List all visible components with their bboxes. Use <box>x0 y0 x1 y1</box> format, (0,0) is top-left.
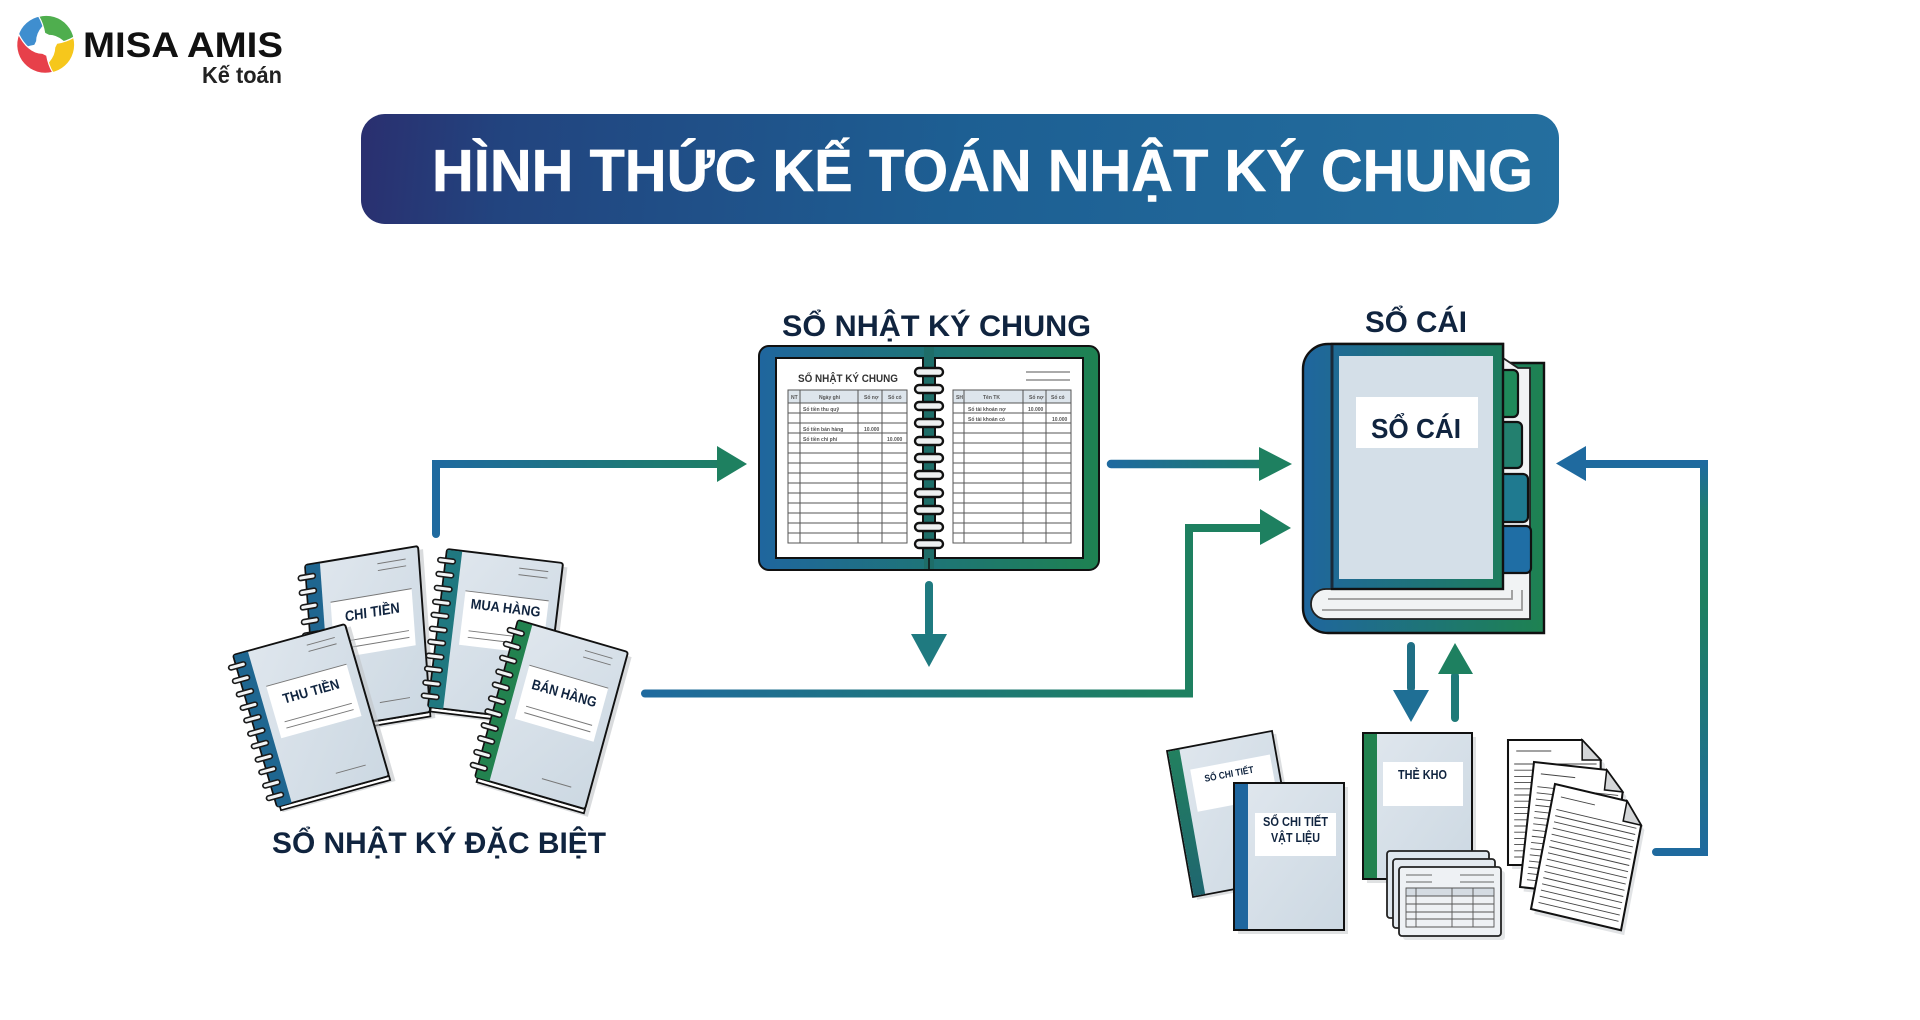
stock card book: thẻ kho <box>1363 733 1476 883</box>
detail book: sổ chi tiết vật liệu: SỔ CHI TIẾT <box>1263 814 1328 829</box>
title banner <box>361 114 1559 224</box>
stock card stack <box>1387 851 1505 940</box>
right page: Số tài khoản có <box>968 416 1005 423</box>
ledger label text: SỔ CÁI <box>1371 413 1461 444</box>
title text: HÌNH THỨC KẾ TOÁN NHẬT KÝ CHUNG <box>432 137 1533 204</box>
arrow: special journals to general journal <box>436 446 747 534</box>
left page: 10.000 <box>864 427 880 433</box>
arrow: ledger down to detail books <box>1393 642 1429 722</box>
arrow: general journal downward <box>911 581 947 667</box>
detail book: sổ chi tiết vật liệu <box>1234 783 1348 934</box>
detail book: sổ chi tiết: SỔ CHI TIẾT <box>1204 764 1255 785</box>
notebook: chi tiền: CHI TIỀN <box>344 599 400 625</box>
heading: general journal: SỔ NHẬT KÝ CHUNG <box>782 309 1091 343</box>
notebook: bán hàng <box>466 618 633 817</box>
right page: Số nợ <box>1029 394 1044 401</box>
left page: 10.000 <box>887 437 903 443</box>
source documents stack <box>1508 740 1649 935</box>
notebook: mua hàng <box>419 548 568 728</box>
left page: NT <box>791 395 798 401</box>
notebook: chi tiền <box>297 545 435 739</box>
heading: special journals: SỔ NHẬT KÝ ĐẶC BIỆT <box>272 826 606 860</box>
icon: swirl logo mark <box>17 15 75 73</box>
notebook: bán hàng: BÁN HÀNG <box>530 676 599 711</box>
right page: Số có <box>1051 394 1065 401</box>
right page: 10.000 <box>1052 417 1068 423</box>
left page <box>776 358 923 558</box>
index tabs <box>1498 370 1531 573</box>
ledger label <box>1356 397 1478 448</box>
arrow: special journals to ledger <box>645 509 1291 694</box>
page block <box>1311 358 1530 619</box>
left page: Số nợ <box>864 394 879 401</box>
left page title: SỔ NHẬT KÝ CHUNG <box>798 372 898 385</box>
stock card book: thẻ kho: THẺ KHO <box>1398 767 1447 782</box>
right page: Tên TK <box>983 395 1000 401</box>
ledger book <box>1303 344 1544 633</box>
right page: 10.000 <box>1028 407 1044 413</box>
front cover <box>1332 344 1503 589</box>
right page: SH <box>956 395 963 401</box>
general journal open notebook <box>759 346 1099 570</box>
logo subtitle: Kế toán <box>202 62 282 88</box>
arrow: general journal to ledger <box>1111 447 1292 481</box>
detail book: sổ chi tiết vật liệu: VẬT LIỆU <box>1271 830 1320 845</box>
notebook: thu tiền: THU TIỀN <box>281 676 341 707</box>
notebook: mua hàng: MUA HÀNG <box>470 596 541 621</box>
left page: Số có <box>888 394 902 401</box>
detail book: sổ chi tiết <box>1167 730 1302 900</box>
special journals group <box>226 545 633 817</box>
left page: Số tiền thu quỹ <box>803 406 839 413</box>
heading: ledger: SỔ CÁI <box>1365 305 1467 339</box>
notebook: thu tiền <box>226 623 395 815</box>
arrow: detail books up to ledger <box>1438 643 1473 722</box>
right page <box>935 358 1083 558</box>
logo wordmark: MISA AMIS <box>83 26 283 65</box>
left page: Số tiền chi phí <box>803 436 838 443</box>
arrow: source documents back to ledger <box>1556 446 1704 852</box>
left page: Ngày ghi <box>819 395 841 401</box>
back cover <box>1303 344 1544 633</box>
right page: Số tài khoản nợ <box>968 406 1006 413</box>
center spine and rings <box>915 347 943 570</box>
logo: MISA AMIS Kế toán <box>17 15 283 88</box>
cover panel <box>1339 356 1493 579</box>
left page: Số tiền bán hàng <box>803 426 843 433</box>
